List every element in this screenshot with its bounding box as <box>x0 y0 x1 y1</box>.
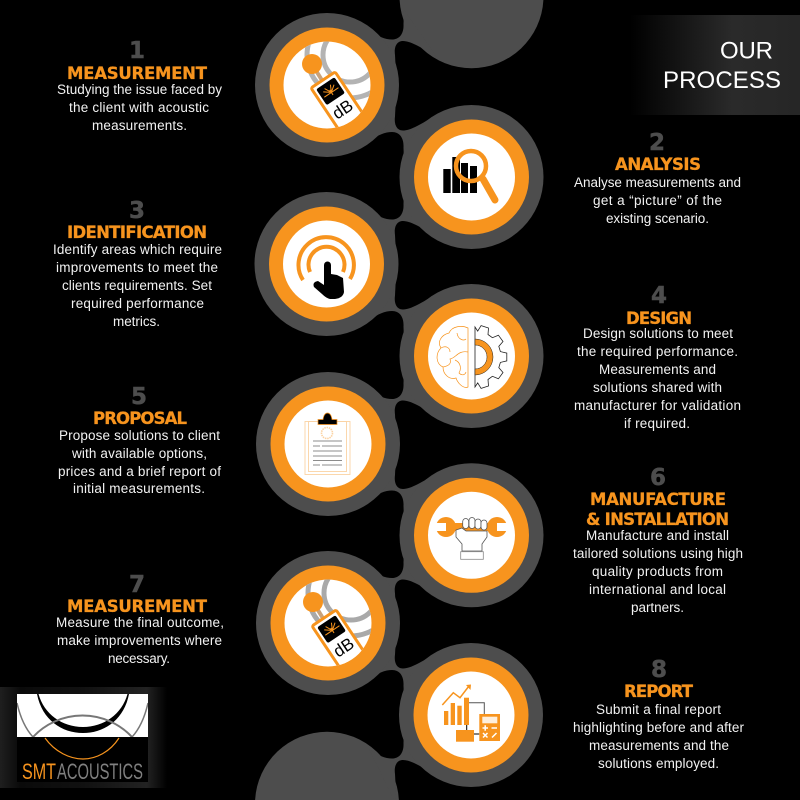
step 8 icon: chart and calculator <box>399 643 543 787</box>
step 4 text: 4 <box>651 283 667 309</box>
step 3 text: 3 <box>129 198 145 224</box>
step 4 text: Design solutions to meet <box>583 326 733 341</box>
step 8 text: solutions employed. <box>598 756 719 771</box>
step 2 icon: magnifier over bars <box>400 105 544 249</box>
step 7 text <box>56 572 224 666</box>
step 4 text: manufacturer for validation <box>574 398 741 413</box>
header: our process <box>630 15 800 115</box>
step 3 text: improvements to meet the <box>56 260 218 275</box>
logo: SMT Acoustics: ACOUSTICS <box>57 759 143 784</box>
step 4 text: solutions shared with <box>593 380 722 395</box>
step 5 text: initial measurements. <box>73 481 205 496</box>
step 1 icon: sound level meter <box>255 12 399 157</box>
step 4 text: the required performance. <box>577 344 738 359</box>
step 7 icon: sound level meter: dB <box>330 634 358 661</box>
step 3 text: metrics. <box>113 314 160 329</box>
step 6 text: & INSTALLATION <box>586 510 729 529</box>
step 4 text: DESIGN <box>626 309 692 328</box>
step 5 icon: clipboard <box>256 372 400 516</box>
step 5 text: prices and a brief report of <box>58 464 221 479</box>
step 7 text: make improvements where <box>57 633 222 648</box>
step 2 text <box>574 130 741 226</box>
logo: SMT Acoustics: SMT <box>22 759 56 784</box>
step 8 text: REPORT <box>624 682 694 701</box>
chain connector <box>255 0 543 800</box>
step 2 text: 2 <box>649 130 665 156</box>
step 2 text: existing scenario. <box>606 211 709 226</box>
step 1 text: measurements. <box>92 118 187 133</box>
step 6 icon: hand holding wrench <box>400 463 544 607</box>
step 5 text: with available options, <box>71 446 207 461</box>
step 2 text: Analyse measurements and <box>574 175 741 190</box>
step 1 text: Studying the issue faced by <box>57 82 222 97</box>
step 6 text <box>573 465 743 615</box>
step 3 icon: touch signal <box>254 192 398 336</box>
step 6 text: quality products from <box>592 564 723 579</box>
step 2 text: get a “picture” of the <box>593 193 722 208</box>
step 5 text: 5 <box>131 384 147 410</box>
step 7 text: Measure the final outcome, <box>56 615 224 630</box>
step 8 text: highlighting before and after <box>573 720 744 735</box>
step 8 text: 8 <box>651 657 667 683</box>
step 1 text: MEASUREMENT <box>67 64 208 83</box>
header: our process: OUR <box>720 38 773 64</box>
step 6 text: tailored solutions using high <box>573 546 743 561</box>
step 1 text: 1 <box>129 38 145 64</box>
step 6 text: international and local <box>589 582 726 597</box>
step 8 text <box>573 657 744 771</box>
step 7 text: 7 <box>129 572 145 598</box>
step 5 text: Propose solutions to client <box>59 428 220 443</box>
step 3 text: IDENTIFICATION <box>67 223 207 242</box>
step 4 text <box>574 283 741 431</box>
step 7 icon: sound level meter <box>256 550 400 695</box>
step 5 text <box>58 384 221 496</box>
step 6 text: 6 <box>650 465 666 491</box>
step 1 text: the client with acoustic <box>69 100 209 115</box>
step 1 text <box>57 38 222 133</box>
step 4 text: Measurements and <box>599 362 716 377</box>
step 3 text: Identify areas which require <box>53 242 222 257</box>
header: our process: PROCESS <box>663 67 781 94</box>
step 8 text: measurements and the <box>589 738 729 753</box>
step 6 text: Manufacture and install <box>586 528 729 543</box>
step 4 icon: brain and gear <box>400 284 544 428</box>
step 5 text: PROPOSAL <box>93 409 187 428</box>
logo: SMT Acoustics <box>0 687 167 788</box>
step 7 text: MEASUREMENT <box>67 597 208 616</box>
step 6 text: MANUFACTURE <box>590 490 726 509</box>
step 3 text: clients requirements. Set <box>62 278 212 293</box>
step 4 text: if required. <box>624 416 690 431</box>
step 2 text: ANALYSIS <box>615 155 701 174</box>
step 6 text: partners. <box>631 600 684 615</box>
step 7 text: necessary. <box>108 651 170 666</box>
step 3 text <box>53 198 222 329</box>
step 8 text: Submit a final report <box>596 702 721 717</box>
step 3 text: required performance <box>71 296 204 311</box>
step 1 icon: sound level meter: dB <box>329 96 357 123</box>
